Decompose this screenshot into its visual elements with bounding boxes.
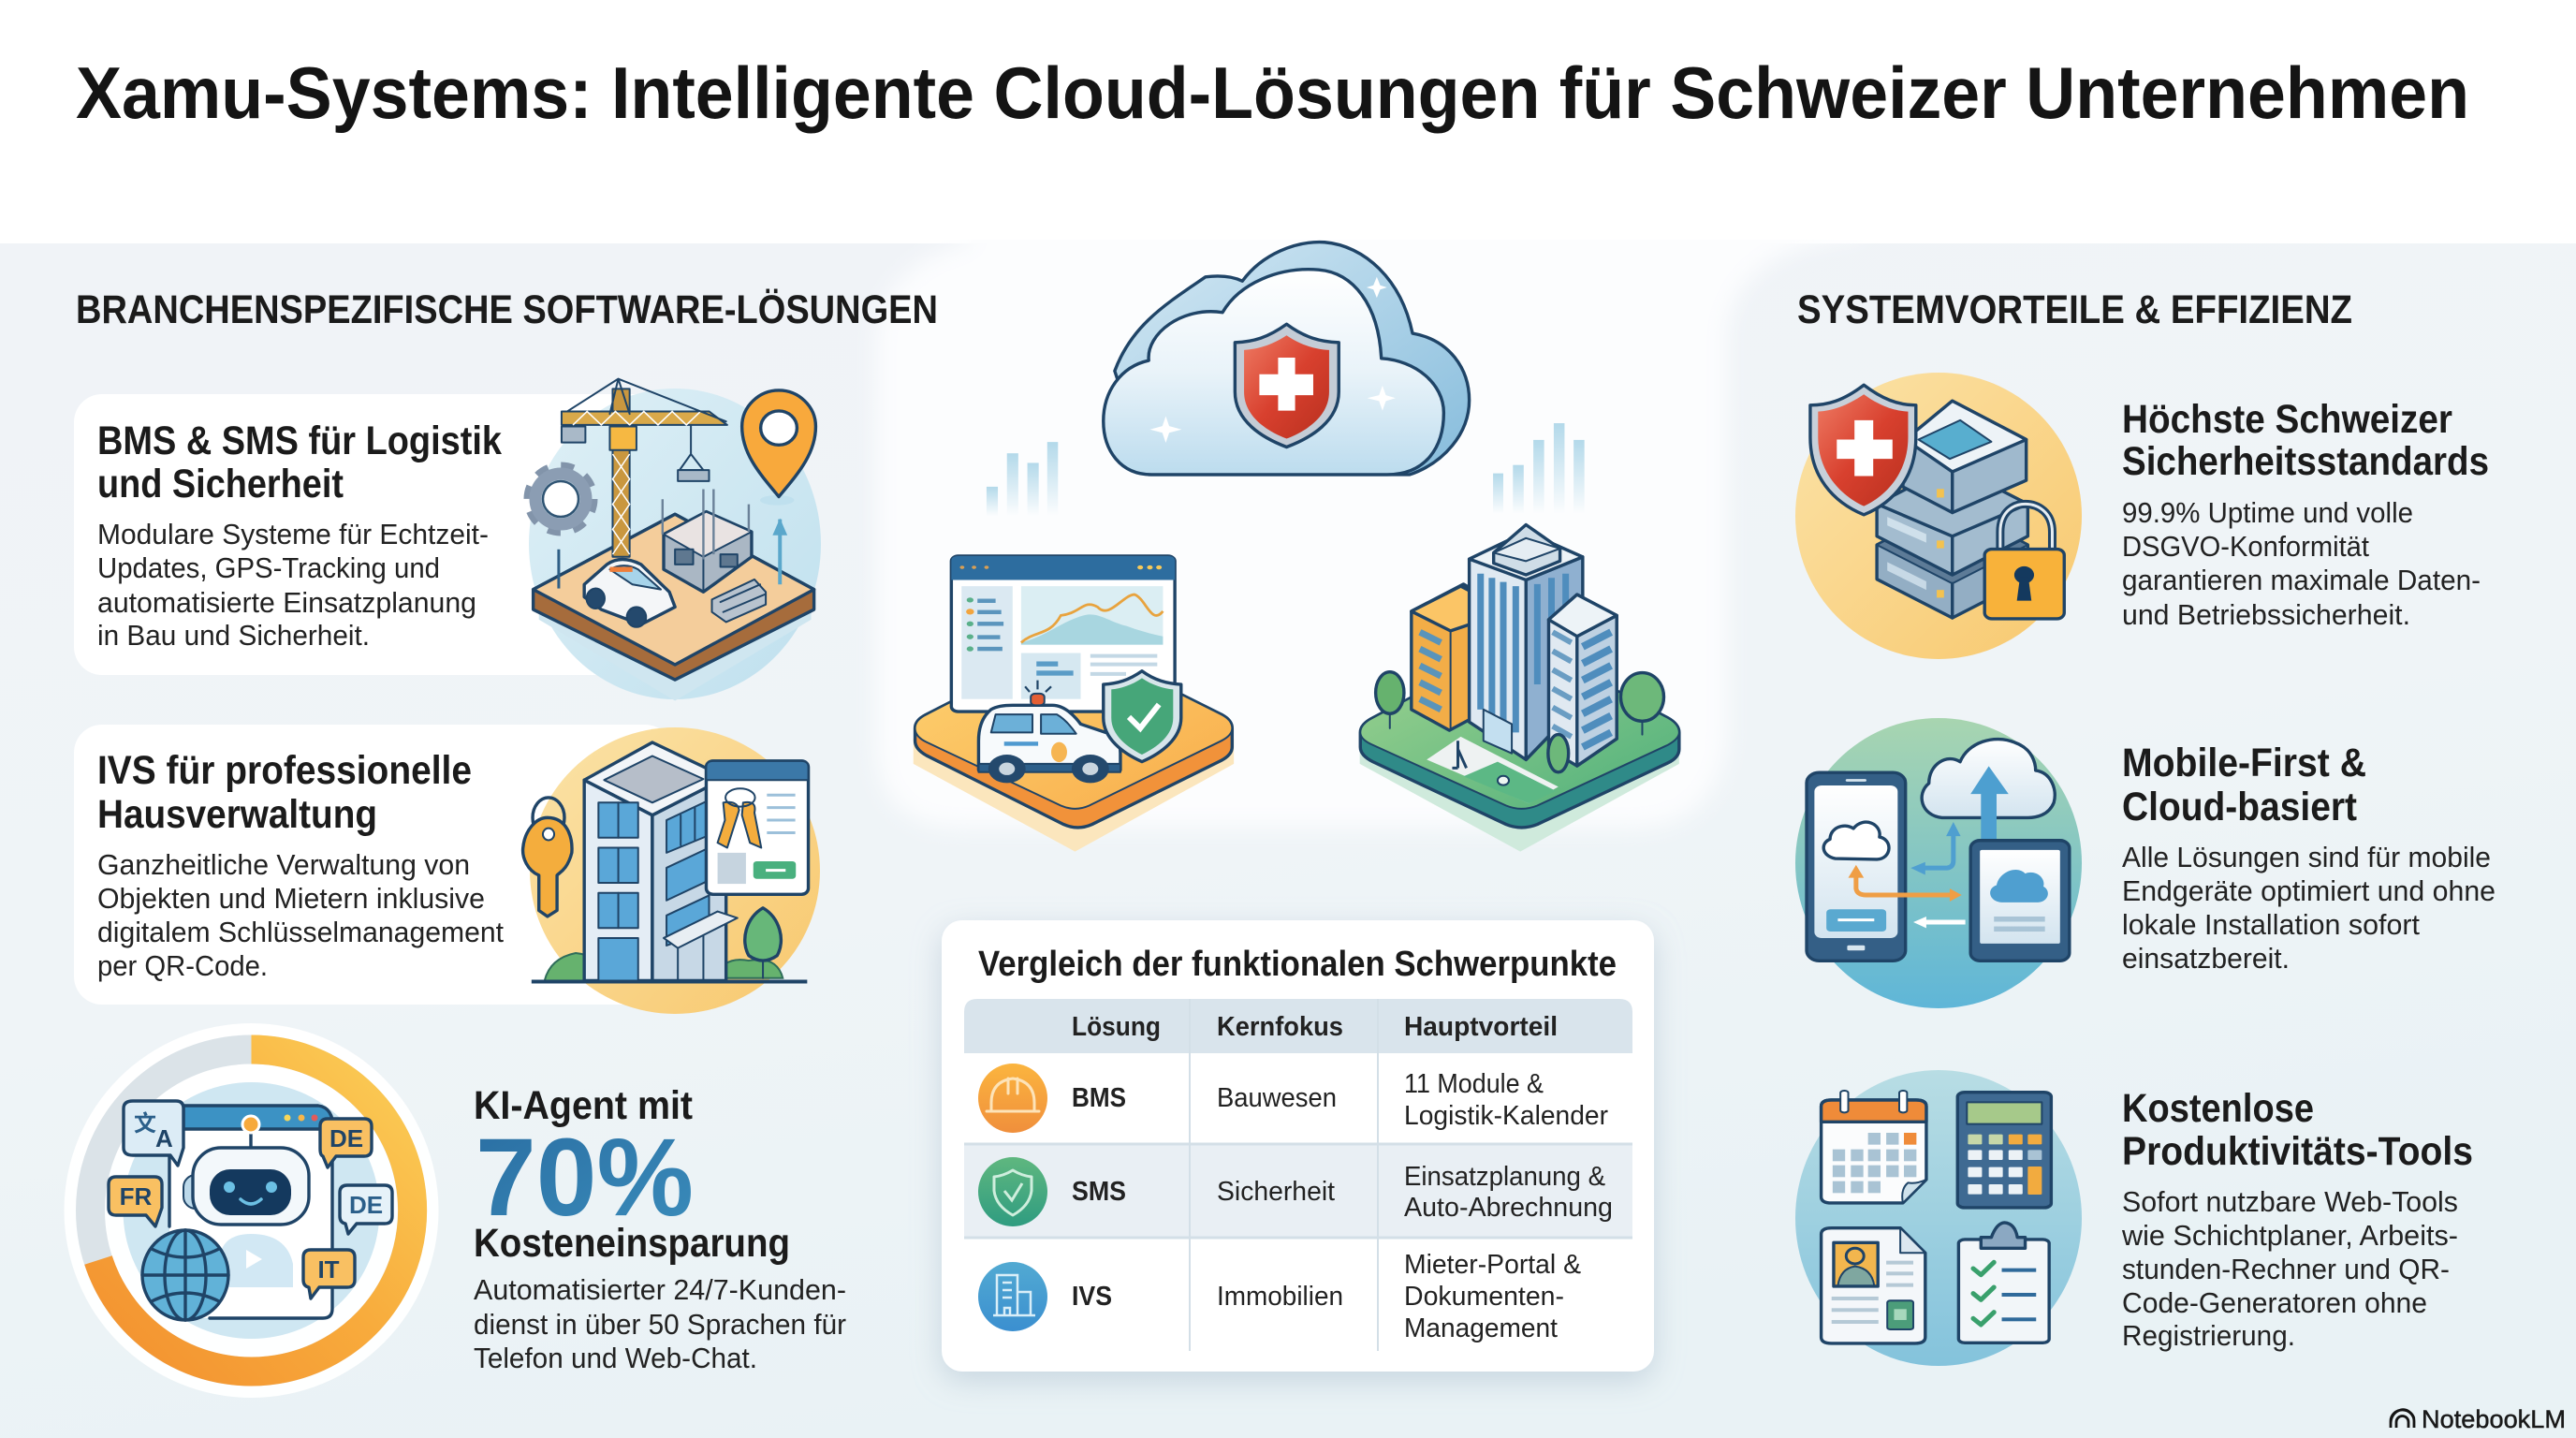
heading: tools: Produktivitäts-Tools: [2122, 1129, 2473, 1174]
panel: free tools: [1795, 1070, 2473, 1366]
table row: SMS: Einsatzplanung &: [1404, 1162, 1605, 1192]
icon: dashboard platform with car and shield: [914, 556, 1234, 852]
panel: KI-Agent: [64, 1023, 846, 1398]
text: tools description: stunden-Rechner und QR-: [2122, 1253, 2450, 1285]
icon: shield: [978, 1157, 1047, 1226]
text: KI-Agent description: Telefon und Web-Chat.: [474, 1342, 757, 1374]
heading: Systemvorteile und Effizienz: SYSTEMVORTEILE & EFFIZIENZ: [1797, 287, 2352, 332]
table row: IVS: [978, 1250, 1581, 1343]
heading: security: Höchste Schweizer: [2122, 397, 2452, 442]
text: KI-Agent description: Automatisierter 24/7-Kunden-: [474, 1273, 846, 1306]
heading: mobile: Mobile-First &: [2122, 741, 2366, 785]
chart: decorative bars right: [1493, 423, 1585, 514]
heading: mobile: [2122, 741, 2366, 829]
text: BMS und SMS description: Updates, GPS-Tracking und: [97, 551, 440, 584]
chart: decorative bars left: [987, 442, 1058, 516]
icon: robot with language bubbles: [109, 1101, 392, 1320]
icon: server stack with shield and lock: [1795, 373, 2082, 659]
text: BMS und SMS description: automatisierte Einsatzplanung: [97, 586, 476, 619]
heading: BMS und SMS: BMS & SMS für Logistik: [97, 418, 502, 463]
heading: BMS und SMS: und Sicherheit: [97, 462, 344, 506]
text: tools description: Code-Generatoren ohne: [2122, 1286, 2427, 1319]
text: BMS und SMS description: [97, 518, 489, 652]
text: tools description: wie Schichtplaner, Arbeits-: [2121, 1219, 2458, 1252]
heading: KI-Agent mit: KI-Agent mit: [474, 1083, 693, 1128]
text: BMS und SMS description: in Bau und Sicherheit.: [97, 619, 370, 652]
text: security description: 99.9% Uptime und volle: [2122, 496, 2413, 529]
icon: phone, tablet and cloud: [1795, 718, 2082, 1008]
table row: IVS: Immobilien: [1217, 1282, 1343, 1312]
text: KI-Agent description: dienst in über 50 Sprachen für: [474, 1308, 846, 1341]
text: tools description: Registrierung.: [2122, 1319, 2295, 1352]
heading: security: Sicherheitsstandards: [2122, 439, 2489, 484]
text: tools description: [2121, 1185, 2458, 1352]
icon: cloud with Swiss shield: [1104, 242, 1470, 475]
text: mobile description: lokale Installation sofort: [2122, 908, 2420, 941]
icon: DE bubble right: DE: [349, 1191, 383, 1219]
icon: FR bubble: FR: [120, 1182, 153, 1211]
panel: mobile first: [1795, 718, 2496, 1008]
heading: Branchenspezifische Software-Lösungen: BRANCHENSPEZIFISCHE SOFTWARE-LÖSUNGEN: [76, 287, 938, 332]
panel: security standards: [1795, 373, 2489, 659]
text: KI-Agent description: [474, 1273, 846, 1374]
table row: BMS: 11 Module &: [1404, 1069, 1544, 1099]
icon: DE bubble right: [340, 1185, 392, 1234]
stat: 70 percent: 70%: [476, 1116, 694, 1240]
text: security description: DSGVO-Konformität: [2122, 530, 2369, 563]
heading: IVS: IVS für professionelle: [97, 748, 472, 793]
text: tools description: Sofort nutzbare Web-Tools: [2122, 1185, 2458, 1218]
table row: IVS: Dokumenten-: [1404, 1282, 1564, 1312]
icon: translate bubble: 文: [134, 1110, 156, 1137]
icon: DE bubble top: [320, 1119, 372, 1167]
text: security description: garantieren maximale Daten-: [2122, 564, 2481, 596]
icon: FR bubble: [109, 1177, 162, 1226]
panel: BMS und SMS: [74, 394, 673, 675]
icon: IT bubble: [303, 1250, 355, 1299]
text: BMS und SMS description: Modulare Systeme für Echtzeit-: [97, 518, 489, 550]
text: IVS description: digitalem Schlüsselmanagement: [97, 916, 504, 948]
panel: comparison table: [942, 920, 1654, 1372]
table row: BMS: BMS: [1072, 1083, 1126, 1113]
table row: BMS: [978, 1064, 1608, 1133]
panel: IVS: [74, 725, 673, 1005]
heading: BMS und SMS: [97, 418, 502, 506]
text: mobile description: Alle Lösungen sind für mobile: [2122, 841, 2491, 873]
text: mobile description: Endgeräte optimiert und ohne: [2122, 874, 2496, 907]
text: mobile description: einsatzbereit.: [2122, 942, 2290, 975]
heading: IVS: [97, 748, 472, 837]
table row: SMS: Sicherheit: [1217, 1177, 1335, 1207]
icon: translate bubble: [124, 1101, 183, 1166]
text: IVS description: Ganzheitliche Verwaltung von: [97, 848, 470, 881]
heading: tools: Kostenlose: [2122, 1086, 2314, 1131]
icon: calendar, calculator, document and checklist: [1795, 1070, 2082, 1366]
icon: helmet: [978, 1064, 1047, 1133]
heading: IVS: Hausverwaltung: [97, 792, 377, 837]
table header row: Kernfokus: [1217, 1012, 1343, 1042]
heading: tools: [2122, 1086, 2473, 1174]
icon: buildings: [978, 1262, 1047, 1331]
table row: IVS: Mieter-Portal &: [1404, 1250, 1581, 1280]
table row: SMS: SMS: [1072, 1177, 1126, 1207]
icon: office buildings on green platform: [1360, 525, 1679, 852]
table header row: Hauptvorteil: [1404, 1012, 1558, 1042]
icon: apartment building with keys: [523, 727, 820, 1014]
icon: DE bubble top: DE: [329, 1124, 363, 1152]
heading: Kosteneinsparung: Kosteneinsparung: [474, 1221, 790, 1266]
table row: BMS: Logistik-Kalender: [1404, 1101, 1608, 1131]
text: IVS description: Objekten und Mietern inklusive: [97, 882, 485, 915]
donut chart: 70 percent savings: [64, 1023, 438, 1398]
table row: BMS: Bauwesen: [1217, 1083, 1337, 1113]
heading: table title: Vergleich der funktionalen Schwerpunkte: [978, 945, 1617, 984]
table row: IVS: IVS: [1072, 1282, 1112, 1312]
title: Xamu-Systems: Intelligente Cloud-Lösungen für Schweizer Unternehmen: [76, 51, 2469, 134]
text: IVS description: per QR-Code.: [97, 949, 268, 982]
table row: SMS: Auto-Abrechnung: [1404, 1193, 1613, 1223]
text: mobile description: [2122, 841, 2496, 975]
text: security description: [2122, 496, 2481, 631]
table row: IVS: Management: [1404, 1313, 1558, 1343]
icon: construction site with crane, car and pin: [529, 379, 821, 701]
heading: mobile: Cloud-basiert: [2122, 785, 2357, 829]
icon: IT bubble: IT: [317, 1255, 340, 1284]
icon: translate bubble: A: [155, 1124, 173, 1152]
logo: NotebookLM: NotebookLM: [2422, 1405, 2566, 1433]
table header row: [964, 999, 1632, 1053]
icon: gear: [529, 467, 593, 531]
text: IVS description: [97, 848, 504, 982]
table row: SMS: [978, 1157, 1613, 1226]
text: security description: und Betriebssicherheit.: [2122, 598, 2410, 631]
heading: security: [2122, 397, 2489, 484]
table header row: Lösung: [1072, 1012, 1161, 1042]
